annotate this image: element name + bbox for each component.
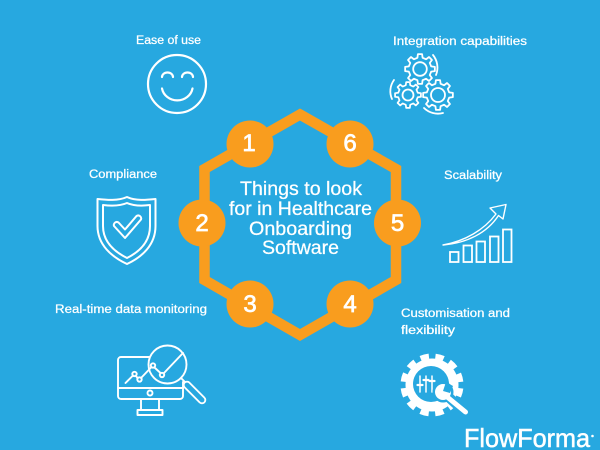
icon: shield with check [98,197,156,264]
icon: gear with sliders and wrench [402,355,466,415]
number 3 [226,280,274,328]
number 5: 5 [391,210,404,237]
icon: monitor with magnifier [118,346,202,415]
number 2 [178,200,226,246]
label: real-time data monitoring: Real-time data monitoring [55,304,207,316]
label: customisation and flexibility: flexibility [401,325,455,337]
number 3: 3 [243,291,257,318]
label: compliance: Compliance [89,169,157,181]
number 4 [326,280,374,328]
label: integration capabilities: Integration capabilities [393,36,527,48]
central title [229,179,372,259]
icon: gears [390,54,453,114]
icon: growth chart [443,204,512,262]
number 6: 6 [343,130,357,157]
number 1: 1 [242,130,256,157]
number 2: 2 [195,210,209,237]
central title: Onboarding [249,219,352,240]
central title: Software [262,238,339,259]
number 5 [374,200,421,246]
number 4: 4 [343,291,357,318]
central title: Things to look [240,179,363,200]
number 6 [326,120,374,168]
label: scalability: Scalability [444,170,502,182]
number 1 [226,120,274,168]
wrench [432,382,466,413]
label: customisation and flexibility: Customisation and [401,308,510,320]
hexagon frame [204,114,396,335]
label: ease of use: Ease of use [136,35,201,47]
icon: smiley face [148,55,206,113]
central title: for in Healthcare [229,199,372,220]
numbered circles [178,120,421,328]
label: customisation and flexibility [401,308,510,337]
